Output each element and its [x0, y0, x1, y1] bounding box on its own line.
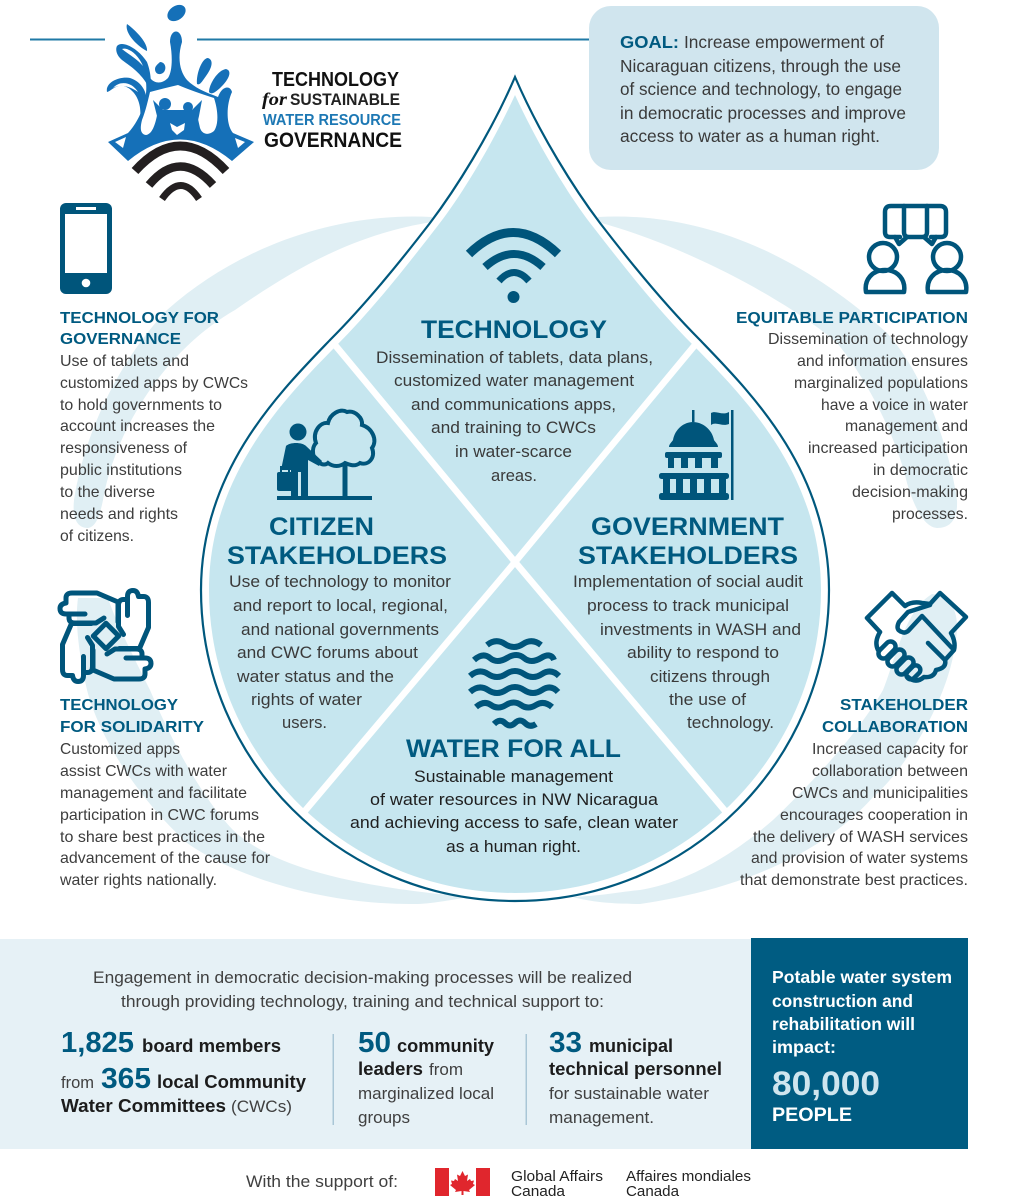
block: technology for governance: to hold governments to — [60, 397, 222, 414]
icon: two people talking — [866, 206, 966, 292]
section: citizen stakeholders: Use of technology to monitor — [229, 572, 451, 591]
section: government stakeholders: GOVERNMENT — [591, 513, 784, 541]
stat: 1,825 board members: Water Committees — [61, 1096, 226, 1116]
section: citizen stakeholders: water status and the — [236, 667, 394, 686]
funder name: french: Affaires mondiales — [626, 1168, 751, 1185]
stat: 50 community leaders: marginalized local — [358, 1084, 494, 1103]
panel: potable water impact: 80,000 — [772, 1065, 880, 1103]
stat: 1,825 board members: (CWCs) — [231, 1097, 292, 1116]
logo: technology for sustainable water resource governance — [107, 2, 402, 199]
stat: 1,825 board members: 365 — [101, 1063, 151, 1095]
goal text: of science and technology, to engage — [620, 79, 902, 99]
panel: potable water impact: Potable water system — [772, 967, 952, 987]
section: government stakeholders: the use of — [669, 690, 746, 709]
section: technology: in water-scarce — [455, 442, 572, 461]
section: government stakeholders: STAKEHOLDERS — [578, 542, 798, 570]
block: technology for governance: to the diverse — [60, 484, 155, 501]
block: equitable participation: Dissemination of technology — [768, 331, 968, 348]
block: stakeholder collaboration: Increased capacity for — [812, 741, 969, 758]
block: equitable participation: decision-making — [852, 484, 968, 501]
intro text: through providing technology, training and technical support to: — [121, 992, 604, 1011]
funder name: english: Canada — [511, 1183, 566, 1200]
icon: interlocked hands — [60, 590, 151, 682]
goal text: access to water as a human right. — [620, 126, 880, 146]
section: water for all: as a human right. — [446, 837, 581, 856]
funder name: english: Global Affairs — [511, 1168, 603, 1185]
section: government stakeholders: Implementation of social audit — [573, 572, 803, 591]
section: citizen stakeholders: and CWC forums about — [237, 643, 418, 662]
logo wordmark — [262, 69, 402, 152]
block: stakeholder collaboration: that demonstrate best practices. — [740, 872, 968, 889]
intro text: Engagement in democratic decision-making processes will be realized — [93, 968, 632, 987]
stat: 1,825 board members: local Community — [157, 1072, 306, 1092]
goal text: in democratic processes and improve — [620, 103, 906, 123]
block: stakeholder collaboration: STAKEHOLDER — [840, 697, 968, 714]
funder name: french: Canada — [626, 1183, 680, 1200]
block: equitable participation: marginalized populations — [794, 375, 968, 392]
block: technology for governance — [60, 310, 248, 545]
icon: water waves — [470, 641, 559, 726]
block: equitable participation: and information ensures — [797, 353, 968, 370]
section: technology: TECHNOLOGY — [421, 316, 607, 344]
block: technology for governance: needs and rights — [60, 506, 178, 523]
section: water for all: WATER FOR ALL — [406, 735, 621, 763]
water drop diagram — [201, 77, 829, 901]
logo wordmark: SUSTAINABLE — [290, 90, 400, 109]
block: technology for solidarity: participation in CWC forums — [60, 807, 259, 824]
block: equitable participation: have a voice in water — [821, 397, 969, 414]
block: technology for governance: account increases the — [60, 418, 215, 435]
goal text — [620, 32, 906, 146]
block: stakeholder collaboration: CWCs and municipalities — [792, 785, 968, 802]
icon: smartphone — [60, 203, 112, 294]
panel: potable water impact: construction and — [772, 991, 913, 1011]
panel: potable water impact — [751, 938, 968, 1149]
stat: 33 municipal technical personnel: municipal — [589, 1036, 673, 1056]
panel: potable water impact: rehabilitation will — [772, 1014, 915, 1034]
stat: 50 community leaders: leaders — [358, 1059, 423, 1079]
block: stakeholder collaboration: the delivery of WASH services — [753, 829, 968, 846]
stat: 33 municipal technical personnel: for sustainable water — [549, 1084, 709, 1103]
block: technology for governance: customized apps by CWCs — [60, 375, 248, 392]
block: stakeholder collaboration — [740, 697, 969, 889]
stat: 1,825 board members: from — [61, 1073, 94, 1092]
section: government stakeholders: investments in WASH and — [600, 620, 801, 639]
icon: person with tree — [277, 411, 374, 500]
block: stakeholder collaboration: and provision of water systems — [751, 850, 968, 867]
block: equitable participation: management and — [845, 418, 968, 435]
section: government stakeholders: citizens through — [650, 667, 770, 686]
icon: handshake — [867, 593, 966, 681]
logo wordmark: for — [262, 89, 288, 109]
block: technology for solidarity: to share best practices in the — [60, 829, 265, 846]
stat: 1,825 board members — [61, 1027, 306, 1116]
panel: potable water impact: PEOPLE — [772, 1105, 852, 1126]
section: water for all: of water resources in NW Nicaragua — [370, 790, 659, 809]
block: technology for solidarity: management and facilitate — [60, 785, 247, 802]
stat: 1,825 board members: 1,825 — [61, 1027, 134, 1059]
block: technology for governance: Use of tablets and — [60, 353, 189, 370]
goal text: Nicaraguan citizens, through the use — [620, 56, 901, 76]
block: equitable participation: in democratic — [873, 462, 968, 479]
section: citizen stakeholders — [227, 513, 451, 732]
block: equitable participation — [736, 310, 969, 523]
block: equitable participation: EQUITABLE PARTICIPATION — [736, 310, 968, 327]
section: government stakeholders: technology. — [687, 713, 774, 732]
section: citizen stakeholders: STAKEHOLDERS — [227, 542, 447, 570]
stat: 50 community leaders: 50 — [358, 1027, 391, 1059]
section: citizen stakeholders: and national governments — [241, 620, 439, 639]
section: technology — [376, 316, 653, 485]
block: technology for solidarity: TECHNOLOGY — [60, 697, 178, 714]
section: citizen stakeholders: CITIZEN — [269, 513, 374, 541]
section: government stakeholders: ability to respond to — [627, 643, 779, 662]
stat: 33 municipal technical personnel: management. — [549, 1108, 654, 1127]
block: technology for solidarity: Customized apps — [60, 741, 180, 758]
block: technology for governance: of citizens. — [60, 528, 134, 545]
section: technology: areas. — [491, 466, 537, 485]
section: government stakeholders: process to track municipal — [587, 596, 789, 615]
block: stakeholder collaboration: collaboration between — [812, 763, 968, 780]
funder name: english — [511, 1168, 603, 1200]
section: technology: customized water management — [394, 371, 634, 390]
section: technology: and communications apps, — [411, 395, 616, 414]
stat: 50 community leaders — [358, 1027, 494, 1127]
block: technology for governance: TECHNOLOGY FOR — [60, 310, 219, 327]
support line: With the support of: — [246, 1172, 398, 1191]
goal text: GOAL: — [620, 32, 679, 52]
goal text: Increase empowerment of — [684, 32, 884, 52]
intro text — [93, 968, 632, 1011]
block: technology for solidarity — [59, 697, 271, 889]
panel: engagement and beneficiaries — [0, 939, 751, 1149]
section: citizen stakeholders: rights of water — [251, 690, 362, 709]
section: citizen stakeholders: users. — [282, 713, 327, 732]
support line — [246, 1168, 751, 1200]
block: technology for solidarity: advancement of the cause for — [60, 850, 271, 867]
block: equitable participation: increased participation — [808, 440, 968, 457]
logo icon: water splash with people and wifi — [107, 2, 254, 199]
logo wordmark: GOVERNANCE — [264, 129, 402, 152]
block: technology for solidarity: water rights nationally. — [59, 872, 217, 889]
logo wordmark: TECHNOLOGY — [272, 69, 400, 91]
section: government stakeholders — [573, 513, 803, 732]
section: water for all: and achieving access to safe, clean water — [350, 813, 678, 832]
block: technology for solidarity: assist CWCs with water — [60, 763, 228, 780]
icon: government building with flag — [659, 410, 734, 500]
stat: 1,825 board members: board members — [142, 1036, 281, 1056]
section: citizen stakeholders: and report to local, regional, — [233, 596, 448, 615]
stat: 50 community leaders: groups — [358, 1108, 410, 1127]
block: technology for governance: GOVERNANCE — [60, 331, 181, 348]
section: technology: and training to CWCs — [431, 418, 596, 437]
block: technology for governance: public institutions — [60, 462, 182, 479]
stat: 50 community leaders: from — [429, 1060, 463, 1079]
block: technology for governance: responsiveness of — [60, 440, 188, 457]
section: technology: Dissemination of tablets, data plans, — [376, 348, 653, 367]
block: stakeholder collaboration: encourages cooperation in — [780, 807, 968, 824]
section: water for all — [350, 735, 678, 856]
funder name: french — [626, 1168, 751, 1200]
stat: 33 municipal technical personnel: technical personnel — [549, 1059, 722, 1079]
stat: 50 community leaders: community — [397, 1036, 494, 1056]
icon: wifi — [469, 232, 558, 303]
icon: canadian flag — [435, 1168, 490, 1196]
stat: 33 municipal technical personnel — [549, 1027, 722, 1127]
block: stakeholder collaboration: COLLABORATION — [822, 719, 968, 736]
block: equitable participation: processes. — [892, 506, 968, 523]
logo wordmark: WATER RESOURCE — [263, 112, 401, 129]
panel: goal — [589, 6, 939, 170]
block: technology for solidarity: FOR SOLIDARITY — [60, 719, 204, 736]
stat: 33 municipal technical personnel: 33 — [549, 1027, 582, 1059]
section: water for all: Sustainable management — [414, 767, 613, 786]
panel: potable water impact: impact: — [772, 1037, 836, 1057]
